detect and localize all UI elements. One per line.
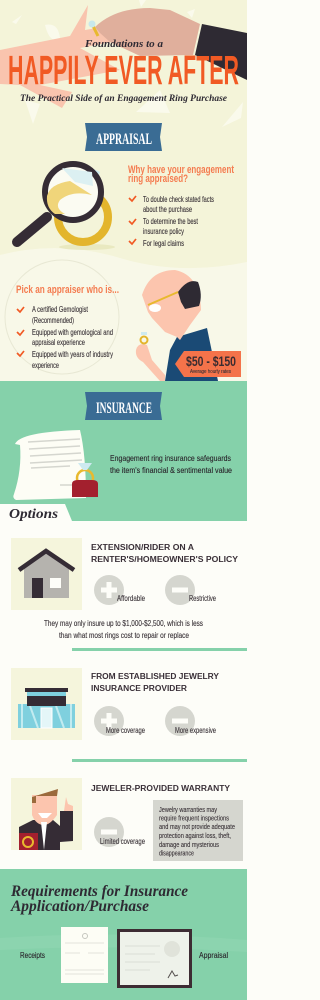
callout: warranty note: disappearance — [159, 848, 194, 858]
icon: framed appraisal — [118, 930, 190, 986]
icon: ring under magnifier — [58, 165, 115, 250]
labels: pros and cons — [117, 594, 216, 603]
text block: insurance description: Engagement ring insurance safeguards — [110, 454, 231, 463]
callout: warranty note: damage and mysterious — [159, 840, 219, 849]
labels: pros and cons: More coverage — [106, 726, 145, 735]
banner: insurance — [85, 392, 162, 420]
text block: why appraise — [128, 164, 234, 248]
text block: coverage limit: They may only insure up to $1,000-$2,500, which is less — [44, 619, 203, 628]
text block: insurance description — [110, 454, 232, 475]
panel: requirements — [0, 869, 247, 1000]
label: appraisal: Appraisal — [199, 951, 228, 960]
text block: coverage limit — [44, 619, 203, 640]
text block: why appraise: To double check stated facts — [143, 195, 214, 204]
icon: receipt — [61, 927, 108, 983]
icon: plus — [94, 706, 124, 736]
icon: jeweler — [11, 778, 82, 850]
icon: house — [11, 538, 82, 610]
icon: minus — [165, 575, 195, 605]
label: receipts: Receipts — [20, 951, 45, 960]
panel: option three — [11, 778, 243, 861]
text block: pick an appraiser: A certified Gemologist — [32, 305, 89, 314]
heading: jewelry insurance provider: FROM ESTABLISHED JEWELRY — [91, 672, 220, 681]
labels: pros and cons — [106, 726, 216, 735]
text block: pick an appraiser: experience — [32, 361, 59, 370]
heading: extension or rider — [91, 543, 239, 564]
panel: insurance background — [0, 381, 247, 521]
icon: jewelry store — [11, 668, 82, 740]
callout: price tag: Average hourly rates — [190, 369, 231, 375]
panel: option two — [11, 668, 220, 740]
heading: jeweler warranty: JEWELER-PROVIDED WARRANTY — [91, 784, 231, 793]
icon: plus — [94, 575, 124, 605]
text block: coverage limit: than what most rings cost to repair or replace — [59, 631, 189, 640]
text block: why appraise: insurance policy — [143, 227, 184, 236]
heading: jewelry insurance provider: INSURANCE PROVIDER — [91, 684, 187, 693]
text block: pick an appraiser: Equipped with years of industry — [32, 350, 113, 359]
heading: jewelry insurance provider — [91, 672, 220, 693]
labels: pros and cons: Restrictive — [189, 594, 216, 603]
text block: why appraise: ring appraised? — [128, 173, 188, 185]
icon: magnifying glass — [17, 164, 101, 242]
text block: pick an appraiser: Equipped with gemological and — [32, 328, 113, 337]
text block: why appraise: To determine the best — [143, 217, 199, 226]
heading: requirements — [10, 883, 188, 915]
icon: hands with ring — [0, 5, 247, 108]
icon: minus — [94, 817, 124, 847]
title: The Practical Side of an Engagement Ring Purchase — [20, 93, 227, 103]
icon: ring box — [72, 463, 98, 497]
text block: insurance description: the item's financial & sentimental value — [110, 466, 232, 475]
panel: appraisal background — [0, 0, 247, 381]
heading: requirements: Application/Purchase — [10, 898, 149, 915]
icon: insurance scroll — [13, 430, 86, 500]
banner: appraisal — [85, 123, 162, 151]
label: limited coverage: Limited coverage — [100, 837, 145, 846]
heading: requirements: Requirements for Insurance — [10, 883, 188, 900]
callout: warranty note — [153, 800, 243, 861]
panel: option one — [11, 538, 239, 640]
text block: pick an appraiser: Pick an appraiser who is... — [16, 284, 119, 296]
labels: pros and cons: More expensive — [175, 726, 216, 735]
text block: pick an appraiser: (Recommended) — [32, 316, 74, 325]
callout: price tag — [175, 351, 241, 377]
heading: extension or rider: EXTENSION/RIDER ON A — [91, 543, 194, 552]
icon: hearts — [12, 0, 243, 127]
icon: minus — [165, 706, 195, 736]
text block: pick an appraiser: appraisal experience — [32, 338, 85, 347]
text block: why appraise: For legal claims — [143, 239, 184, 248]
title — [8, 38, 239, 103]
callout: warranty note: Jewelry warranties may — [159, 805, 217, 814]
labels: pros and cons: Affordable — [117, 594, 145, 603]
text block: pick an appraiser — [5, 260, 119, 374]
banner: appraisal: APPRAISAL — [96, 131, 152, 148]
heading: options: Options — [9, 507, 59, 522]
banner: insurance: INSURANCE — [96, 400, 152, 417]
heading: extension or rider: RENTER'S/HOMEOWNER'S POLICY — [91, 555, 239, 564]
text block: why appraise: about the purchase — [143, 205, 192, 214]
infographic — [0, 0, 247, 1000]
title: Foundations to a — [84, 38, 164, 50]
heading: options — [0, 504, 72, 522]
panel: options background — [0, 521, 247, 869]
icon: appraiser — [136, 270, 218, 381]
